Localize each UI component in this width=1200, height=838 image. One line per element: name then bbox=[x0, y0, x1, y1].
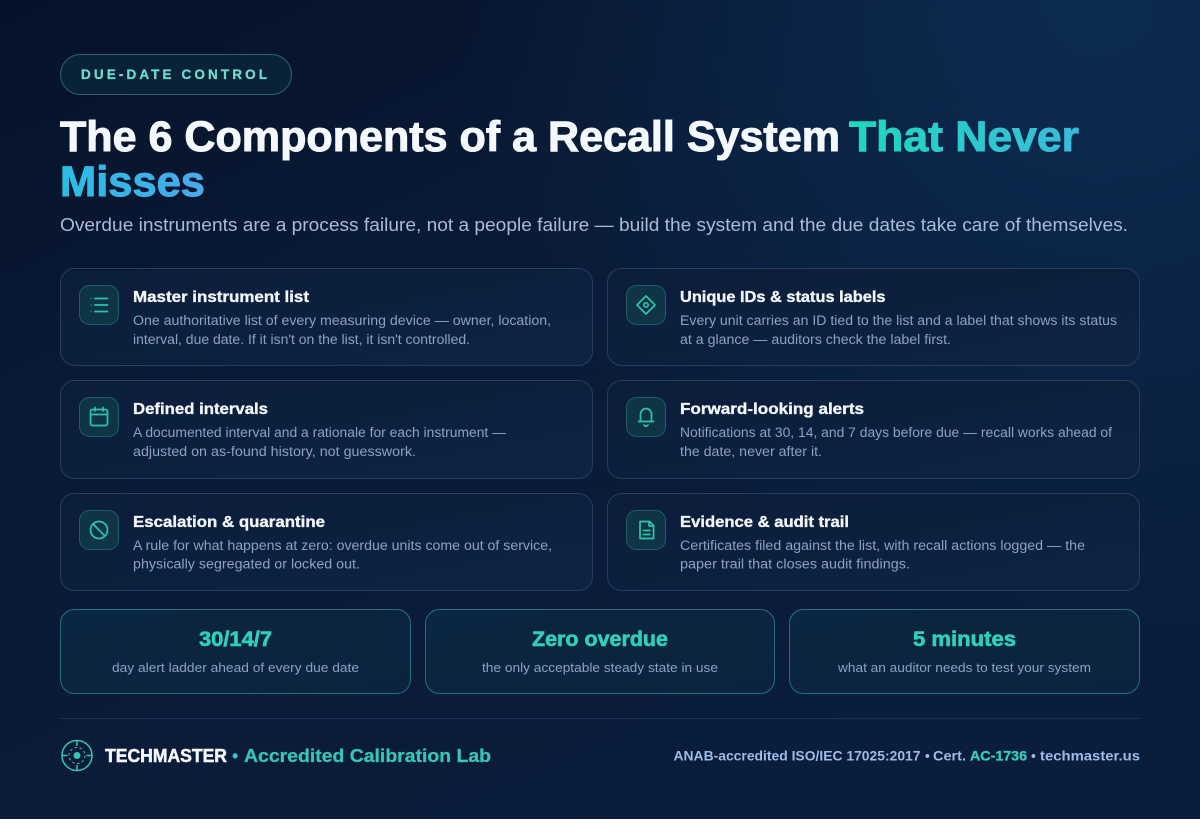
title bbox=[60, 113, 1079, 206]
stat: 5 minutes: what an auditor needs to test your system bbox=[837, 660, 1091, 675]
stat: 30/14/7: day alert ladder ahead of every due date bbox=[112, 660, 359, 675]
panel: escalation and quarantine: Escalation & quarantine bbox=[133, 514, 325, 531]
panel: evidence and audit trail bbox=[608, 494, 1140, 590]
panel: forward-looking alerts bbox=[608, 380, 1140, 478]
footer accreditation: Cert. bbox=[933, 748, 966, 764]
footer accreditation: techmaster.us bbox=[1040, 748, 1140, 764]
panel: evidence and audit trail: Certificates filed against the list, with recall actions logged — the bbox=[680, 538, 1085, 553]
panel: escalation and quarantine bbox=[60, 494, 592, 590]
icon: document bbox=[640, 522, 654, 538]
footer accreditation: • bbox=[1031, 748, 1036, 764]
stat: zero overdue bbox=[426, 610, 774, 694]
panel: evidence and audit trail: paper trail that closes audit findings. bbox=[680, 556, 910, 572]
panel: defined intervals: adjusted on as-found history, not guesswork. bbox=[133, 444, 416, 459]
footer accreditation: • bbox=[925, 748, 930, 764]
panel: evidence and audit trail: Evidence & audit trail bbox=[680, 514, 849, 531]
footer accreditation bbox=[674, 748, 1140, 764]
footer brand: TECHMASTER bbox=[105, 746, 227, 766]
icon: calendar bbox=[90, 408, 108, 426]
footer accreditation: ANAB-accredited ISO/IEC 17025:2017 bbox=[674, 748, 920, 764]
icon: bell bbox=[638, 408, 654, 426]
title: The 6 Components of a Recall System bbox=[60, 113, 840, 161]
panel: escalation and quarantine: physically segregated or locked out. bbox=[133, 556, 360, 572]
panel: unique IDs and status labels: at a glance — auditors check the label first. bbox=[680, 332, 951, 347]
badge: due-date control: DUE-DATE CONTROL bbox=[81, 67, 267, 82]
stat: 30/14/7: 30/14/7 bbox=[199, 628, 272, 651]
panel: forward-looking alerts: Forward-looking alerts bbox=[680, 401, 864, 418]
footer brand: • bbox=[232, 746, 238, 766]
icon: calibration target logo bbox=[62, 740, 92, 770]
icon: diamond tag bbox=[637, 296, 655, 314]
panel: unique IDs and status labels: Every unit carries an ID tied to the list and a label that shows its status bbox=[680, 313, 1117, 328]
panel: master instrument list: Master instrument list bbox=[133, 289, 310, 306]
panel: unique IDs and status labels: Unique IDs & status labels bbox=[680, 289, 886, 306]
stat: 5 minutes: 5 minutes bbox=[913, 628, 1016, 651]
panel: escalation and quarantine: A rule for what happens at zero: overdue units come out of service, bbox=[133, 538, 552, 553]
title: That Never bbox=[849, 113, 1079, 161]
footer brand: Accredited Calibration Lab bbox=[244, 746, 491, 766]
panel: defined intervals: Defined intervals bbox=[133, 401, 268, 418]
title: Misses bbox=[60, 158, 205, 206]
stat: zero overdue: the only acceptable steady state in use bbox=[482, 660, 718, 675]
panel: unique IDs and status labels bbox=[608, 268, 1140, 366]
icon: list bbox=[91, 298, 108, 312]
badge: due-date control bbox=[60, 54, 292, 94]
panel: master instrument list bbox=[60, 268, 592, 366]
icon: prohibited bbox=[90, 522, 108, 538]
panel: defined intervals: A documented interval and a rationale for each instrument — bbox=[133, 425, 507, 440]
panel: master instrument list: interval, due date. If it isn't on the list, it isn't controlled. bbox=[133, 332, 470, 347]
panel: master instrument list: One authoritative list of every measuring device — owner, location, bbox=[133, 313, 551, 328]
panel: forward-looking alerts: Notifications at 30, 14, and 7 days before due — recall works ahead of bbox=[680, 425, 1112, 440]
panel: defined intervals bbox=[60, 380, 592, 478]
panel: forward-looking alerts: the date, never after it. bbox=[680, 444, 822, 459]
footer accreditation: AC-1736 bbox=[970, 748, 1027, 764]
footer brand bbox=[62, 740, 491, 770]
stat: 5 minutes bbox=[790, 610, 1140, 694]
subtitle: Overdue instruments are a process failure, not a people failure — build the system and the due dates take care of themselves. bbox=[60, 215, 1128, 235]
stat: 30/14/7 bbox=[60, 610, 410, 694]
stat: zero overdue: Zero overdue bbox=[532, 628, 668, 651]
